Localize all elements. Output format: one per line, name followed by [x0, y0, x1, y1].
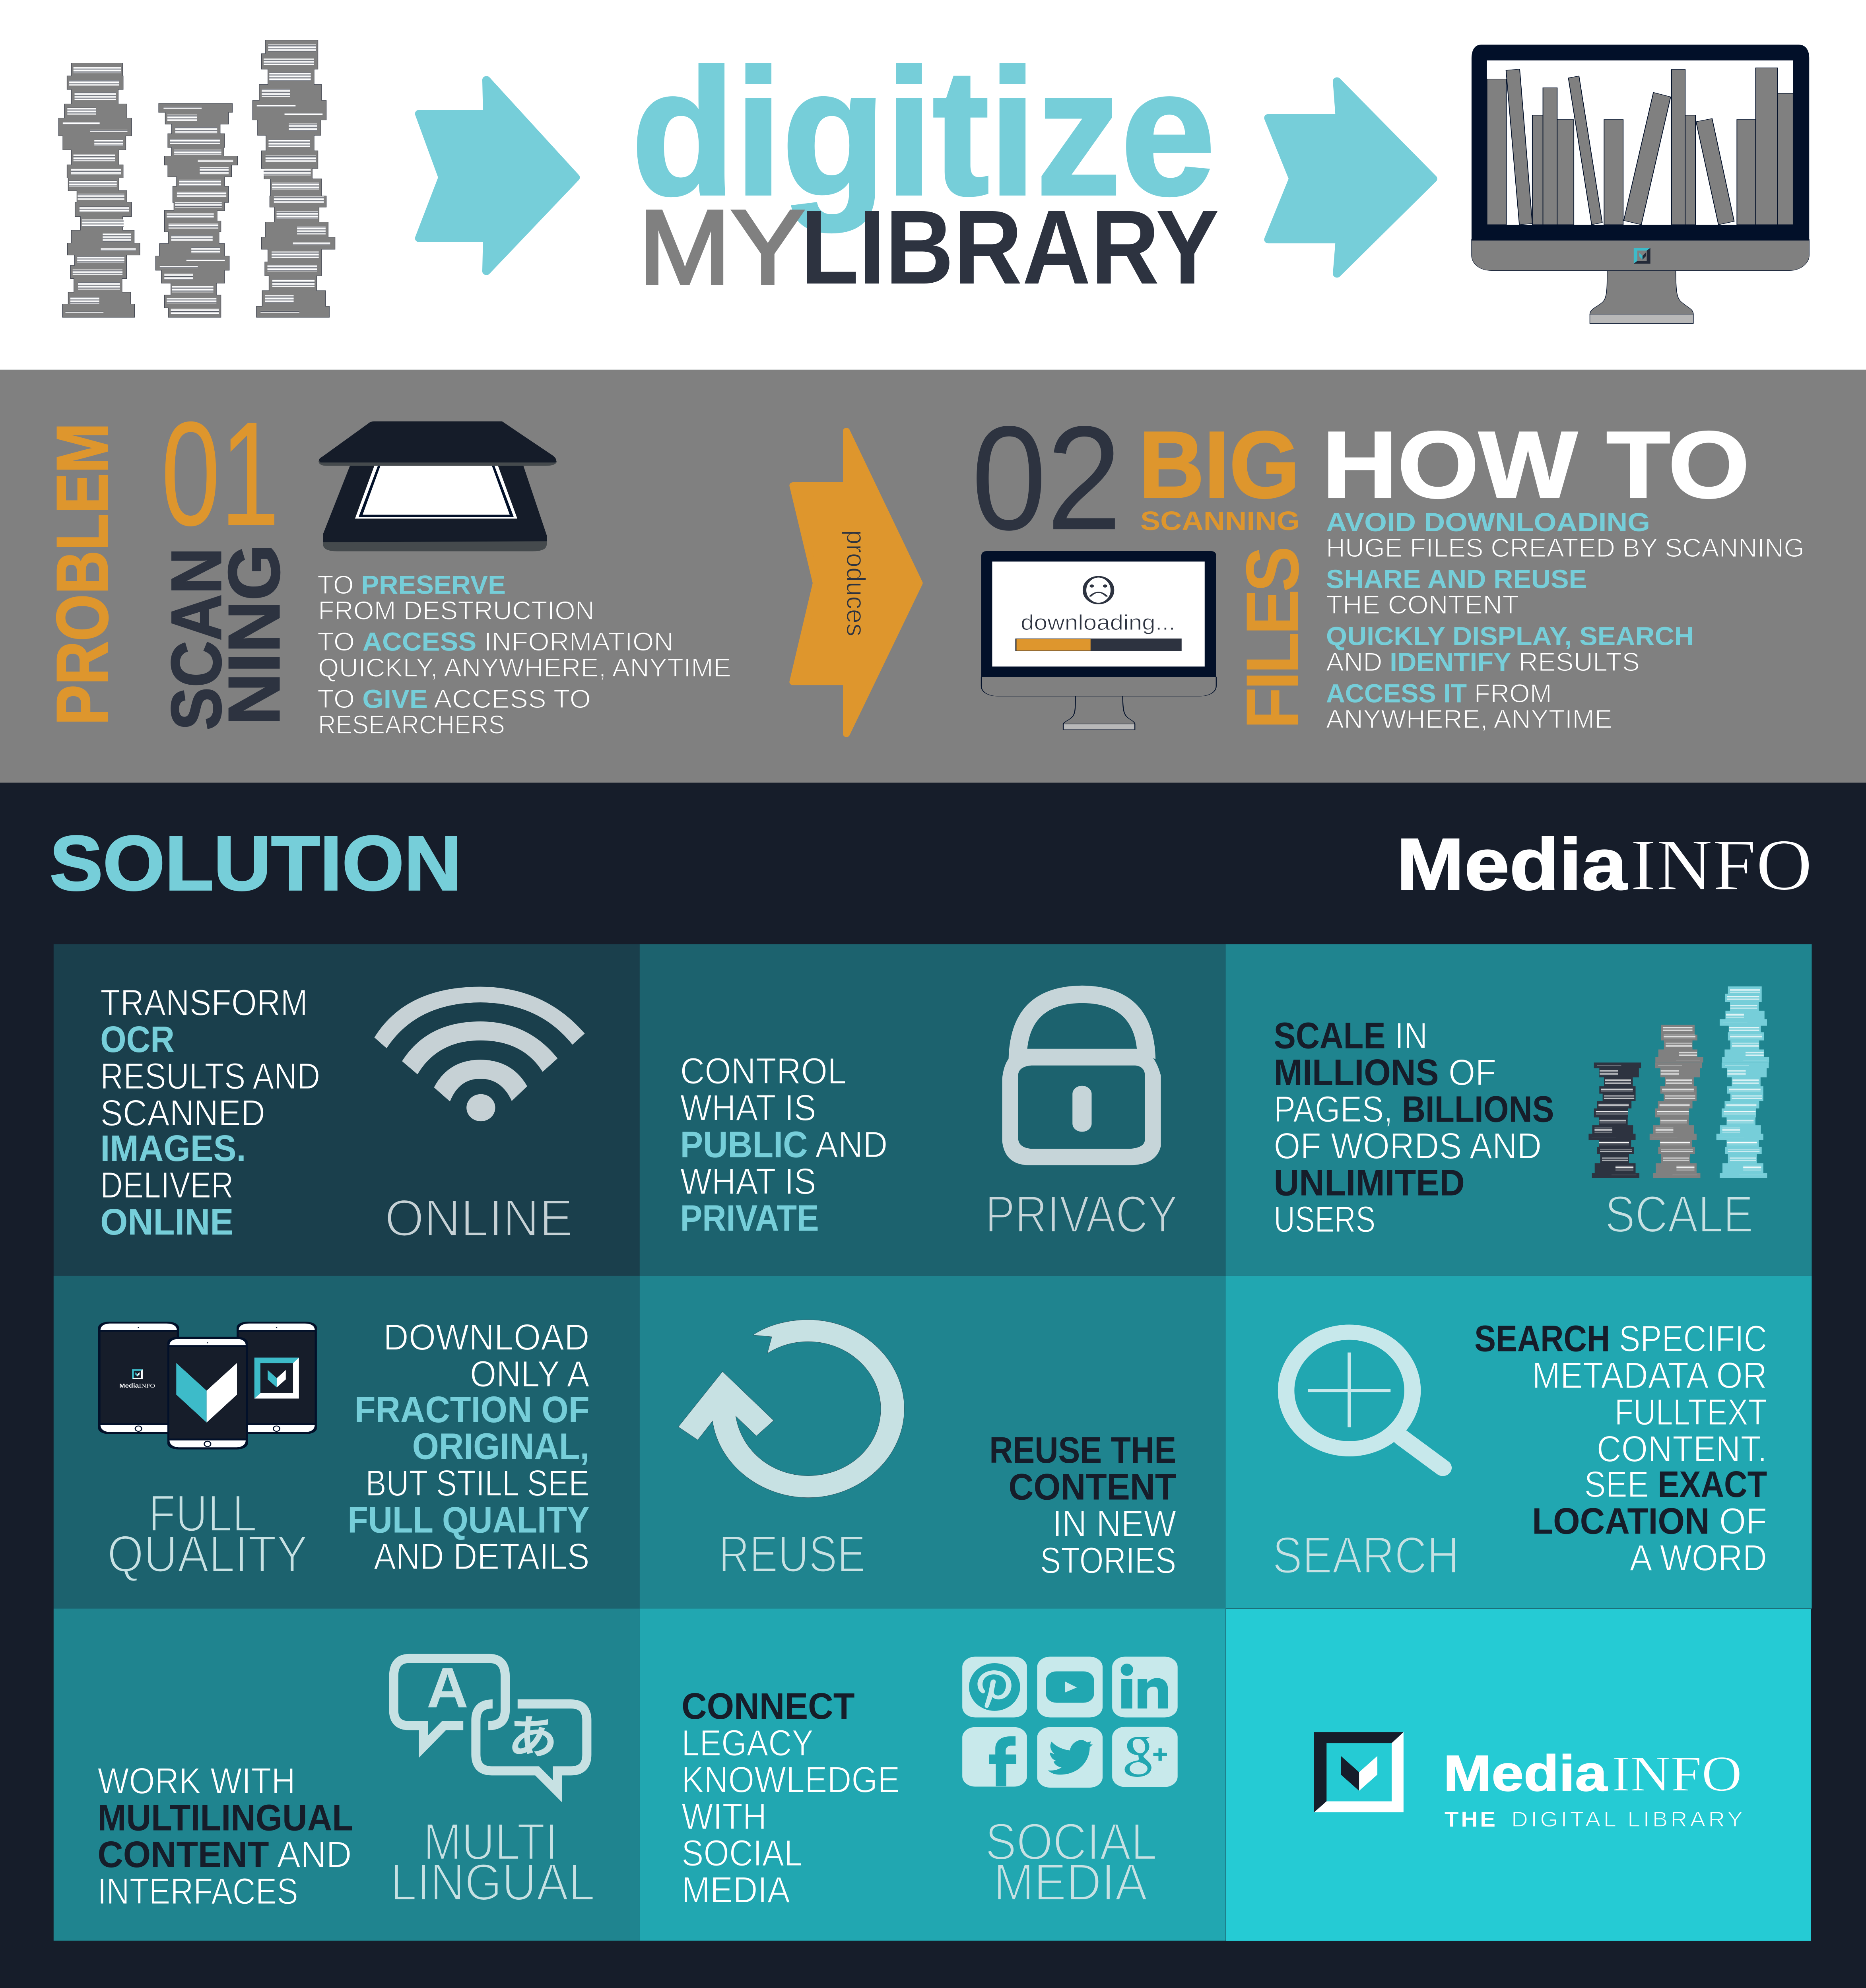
text: privacy description: PUBLIC AND [680, 1124, 887, 1165]
label: social media: SOCIAL [985, 1813, 1157, 1871]
icon: translation speech bubbles [394, 1656, 587, 1791]
label: search: SEARCH [1272, 1526, 1459, 1584]
icon: monitor with downloading screen: downloading... [1021, 610, 1175, 634]
text: full quality description [348, 1317, 590, 1577]
label: produces: produces [841, 530, 870, 637]
text: multilingual description: INTERFACES [97, 1871, 298, 1912]
text: why scanning [317, 571, 731, 739]
icon: magnifying glass [1286, 1332, 1443, 1468]
arrow: digitize to digital library [1268, 81, 1433, 274]
logo: mediainfo the digital library: INFO [1612, 1746, 1742, 1802]
text: full quality description: ONLY A [470, 1354, 590, 1395]
text: search description: LOCATION OF [1532, 1501, 1767, 1542]
label: online: ONLINE [385, 1189, 573, 1247]
text: social media description: MEDIA [682, 1870, 790, 1910]
text: full quality description: FULL QUALITY [348, 1500, 590, 1540]
text: how to list [1326, 508, 1804, 734]
heading: how to: HOW TO [1322, 412, 1749, 518]
text: why scanning: TO PRESERVE [317, 571, 506, 600]
label: reuse: REUSE [718, 1525, 866, 1583]
text: online description: SCANNED [100, 1093, 265, 1134]
text: how to list: SHARE AND REUSE [1326, 565, 1587, 594]
title: digitize my library: MY [639, 188, 805, 306]
text: search description [1474, 1318, 1767, 1578]
icon: translation speech bubbles: あ [508, 1712, 557, 1763]
panel: online [54, 944, 640, 1276]
arrow: books to digitize [419, 80, 576, 271]
icon: three stacks of physical books [59, 40, 335, 317]
text: how to list: ACCESS IT FROM [1326, 679, 1552, 708]
text: full quality description: ORIGINAL, [412, 1426, 590, 1467]
text: multilingual description [97, 1761, 353, 1912]
icon: desktop monitor with digital bookshelf [1472, 45, 1809, 323]
label: multilingual: MULTI [423, 1813, 558, 1871]
icon: reuse circular arrow [678, 1320, 904, 1498]
text: privacy description: PRIVATE [680, 1198, 819, 1239]
heading: scanning [157, 544, 295, 730]
title: digitize my library: digitize [631, 32, 1215, 233]
text: full quality description: DOWNLOAD [383, 1317, 590, 1358]
text: social media description: WITH [682, 1796, 767, 1837]
heading: scanning: NING [214, 544, 295, 725]
text: why scanning: QUICKLY, ANYWHERE, ANYTIME [318, 654, 731, 682]
text: social media description: KNOWLEDGE [682, 1759, 900, 1800]
text: why scanning: RESEARCHERS [318, 711, 505, 739]
icon: flatbed scanner [318, 421, 557, 551]
text: multilingual description: MULTILINGUAL [97, 1798, 353, 1839]
label: multilingual [390, 1813, 595, 1911]
text: online description: TRANSFORM [100, 982, 308, 1023]
text: scale description: PAGES, BILLIONS [1274, 1089, 1554, 1130]
text: online description: DELIVER [100, 1165, 233, 1206]
number: 01: 01 [161, 391, 280, 557]
text: search description: FULLTEXT [1615, 1392, 1767, 1433]
text: scale description: OF WORDS AND [1274, 1126, 1542, 1167]
heading: files: FILES [1231, 546, 1315, 729]
icon: translation speech bubbles: A [427, 1656, 468, 1720]
text: why scanning: FROM DESTRUCTION [318, 596, 594, 625]
text: how to list: ANYWHERE, ANYTIME [1326, 705, 1612, 734]
background: navy solution band [0, 783, 1866, 1988]
label: full quality: FULL [148, 1484, 257, 1542]
heading: scanning files sub-label: SCANNING [1140, 506, 1300, 536]
text: scale description: USERS [1274, 1199, 1375, 1240]
panel: full quality [54, 1276, 640, 1609]
text: search description: A WORD [1630, 1538, 1767, 1578]
text: privacy description: WHAT IS [680, 1161, 816, 1202]
title: digitize my library: LIBRARY [801, 188, 1219, 306]
icon: wifi [375, 987, 585, 1121]
text: reuse description: CONTENT [1009, 1467, 1176, 1508]
background: grey problem band [0, 370, 1866, 783]
text: how to list: THE CONTENT [1326, 590, 1519, 619]
text: reuse description: REUSE THE [989, 1430, 1176, 1471]
icon: three phones with logo: Media INFO [119, 1382, 155, 1389]
heading: solution: SOLUTION [50, 820, 462, 907]
heading: problem: PROBLEM [42, 423, 123, 725]
text: multilingual description: CONTENT AND [97, 1834, 352, 1875]
text: scale description: UNLIMITED [1274, 1163, 1465, 1203]
label: social media: MEDIA [994, 1853, 1148, 1911]
text: online description: ONLINE [100, 1202, 233, 1242]
panel: reuse [640, 1276, 1226, 1609]
logo: mediainfo the digital library: DIGITAL LIBRARY [1511, 1807, 1743, 1831]
heading: big: BIG [1139, 412, 1300, 518]
text: how to list: AVOID DOWNLOADING [1326, 508, 1650, 537]
title: digitize my library [631, 32, 1219, 306]
text: social media description: SOCIAL [682, 1833, 802, 1874]
text: reuse description [989, 1430, 1176, 1581]
text: full quality description: BUT STILL SEE [365, 1463, 590, 1504]
panel: scale [1226, 944, 1812, 1276]
arrow: scanning produces [793, 431, 919, 734]
text: online description [100, 982, 320, 1242]
background: white header band [0, 0, 1866, 370]
text: social media description [682, 1686, 900, 1910]
label: social media [985, 1813, 1157, 1911]
text: privacy description: CONTROL [680, 1051, 847, 1092]
text: search description: SEARCH SPECIFIC [1474, 1318, 1767, 1359]
panel: mediainfo brand [1226, 1609, 1811, 1941]
text: online description: RESULTS AND [100, 1056, 320, 1097]
text: scale description: SCALE IN [1274, 1015, 1428, 1056]
text: privacy description [680, 1051, 887, 1239]
panel: social media [640, 1609, 1226, 1941]
text: how to list: AND IDENTIFY RESULTS [1326, 648, 1640, 677]
logo: mediainfo the digital library: THE [1445, 1807, 1495, 1831]
number: 02: 02 [971, 396, 1122, 561]
logo: mediainfo wordmark [1396, 823, 1812, 905]
label: privacy: PRIVACY [985, 1185, 1178, 1243]
text: social media description: CONNECT [682, 1686, 855, 1727]
text: search description: CONTENT. [1597, 1429, 1767, 1470]
logo: mediainfo wordmark: Media [1396, 823, 1628, 905]
text: social media description: LEGACY [682, 1723, 814, 1764]
text: search description: METADATA OR [1532, 1355, 1767, 1396]
text: scale description [1274, 1015, 1554, 1240]
panel: search [1226, 1276, 1812, 1609]
logo: mediainfo the digital library: Media [1443, 1745, 1608, 1802]
panel: multilingual [54, 1609, 640, 1941]
icons: social networks [962, 1657, 1178, 1788]
heading: scanning: SCAN [157, 547, 236, 730]
text: full quality description: FRACTION OF [355, 1389, 590, 1430]
text: why scanning: TO GIVE ACCESS TO [317, 685, 591, 714]
label: multilingual: LINGUAL [390, 1853, 595, 1911]
text: online description: OCR [100, 1019, 175, 1060]
icon: three growing book stacks [1588, 986, 1769, 1178]
text: how to list: HUGE FILES CREATED BY SCANNING [1326, 534, 1804, 563]
text: online description: IMAGES. [100, 1128, 246, 1169]
label: full quality [107, 1484, 308, 1583]
logo: mediainfo wordmark: INFO [1630, 824, 1812, 905]
logo: mediainfo the digital library [1443, 1745, 1743, 1831]
label: scale: SCALE [1605, 1185, 1753, 1243]
text: privacy description: WHAT IS [680, 1088, 816, 1128]
icon: padlock [1002, 986, 1161, 1165]
text: multilingual description: WORK WITH [97, 1761, 295, 1802]
label: full quality: QUALITY [107, 1525, 308, 1583]
text: reuse description: IN NEW [1052, 1503, 1176, 1544]
text: search description: SEE EXACT [1584, 1464, 1767, 1505]
icon: monitor with downloading screen [981, 551, 1216, 730]
text: reuse description: STORIES [1040, 1540, 1176, 1581]
panel: privacy [640, 944, 1226, 1276]
text: why scanning: TO ACCESS INFORMATION [317, 627, 674, 656]
logo: mediainfo brand mark [1314, 1732, 1404, 1812]
icon: three phones with logo [98, 1322, 317, 1449]
text: scale description: MILLIONS OF [1274, 1052, 1496, 1093]
text: how to list: QUICKLY DISPLAY, SEARCH [1326, 622, 1694, 651]
text: full quality description: AND DETAILS [374, 1536, 590, 1577]
